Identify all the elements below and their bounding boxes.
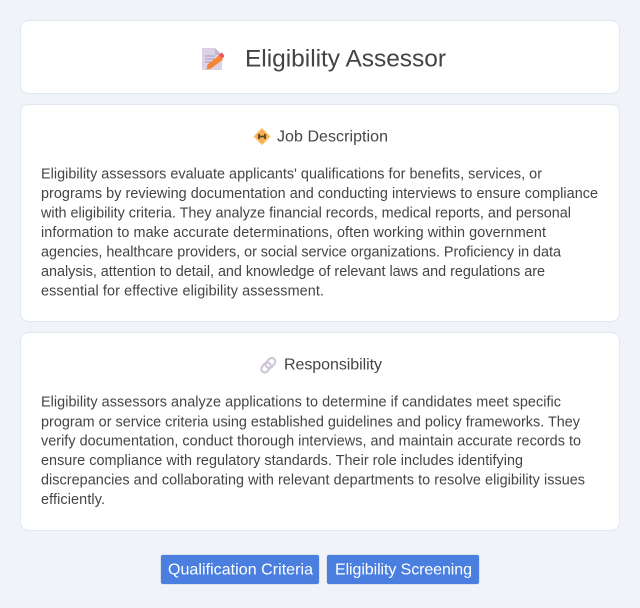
text block: job description: Eligibility assessors evaluate applicants' qualifications for benefits, services, or <box>41 166 542 182</box>
tag: qualification criteria: Qualification Criteria <box>168 562 313 578</box>
tag: qualification criteria <box>160 554 320 584</box>
title: Eligibility Assessor <box>245 46 446 72</box>
heading: responsibility: Responsibility <box>284 356 382 374</box>
tag: eligibility screening: Eligibility Screening <box>335 562 472 578</box>
text block: job description: with eligibility criteria. They analyze financial records, medical reports, and personal <box>40 206 571 222</box>
tag: eligibility screening <box>326 554 480 584</box>
text block: responsibility: discrepancies and collaborating with relevant departments to resolve eligibility issues <box>41 472 585 488</box>
panel: responsibility <box>20 332 620 530</box>
text block: responsibility: Eligibility assessors analyze applications to determine if candidates meet specific <box>41 394 561 410</box>
icon: document with pencil <box>202 48 224 70</box>
panel: job description <box>20 104 620 322</box>
heading: job description: Job Description <box>277 128 388 146</box>
text block: responsibility: efficiently. <box>41 492 105 508</box>
text block: responsibility: ensure compliance with regulatory standards. Their role includes identifying <box>41 453 523 469</box>
text block: responsibility: verify documentation, conduct thorough interviews, and maintain accurate records to <box>41 434 581 450</box>
text block: job description: agencies, healthcare providers, or social service organizations. Proficiency in data <box>41 244 561 260</box>
icon: road sign diamond <box>254 128 270 144</box>
text block: responsibility: program or service criteria using established guidelines and policy frameworks. They <box>41 414 581 430</box>
text block: job description: analysis, attention to detail, and knowledge of relevant laws and regulations are <box>41 264 545 280</box>
text block: job description <box>40 166 598 300</box>
text block: responsibility <box>41 394 585 508</box>
text block: job description: essential for effective eligibility assessment. <box>41 284 324 300</box>
text block: job description: information to make accurate determinations, often working within government <box>41 225 546 241</box>
text block: job description: programs by reviewing documentation and conducting interviews to ensure compliance <box>41 186 598 202</box>
panel: header <box>20 20 620 94</box>
icon: chain link <box>260 357 277 374</box>
